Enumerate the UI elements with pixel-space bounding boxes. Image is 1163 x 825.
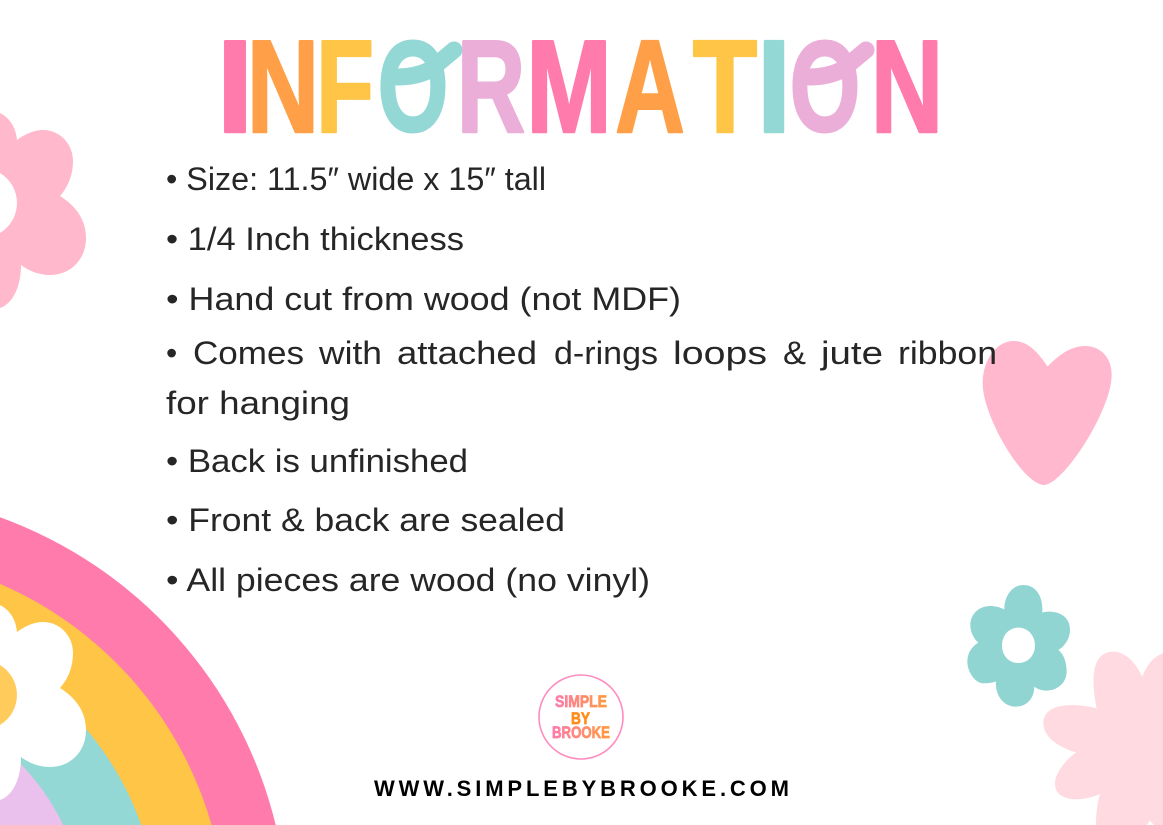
logo badge [539, 675, 623, 759]
text: back: • Back is unfinished [166, 443, 468, 479]
title [216, 13, 943, 161]
icon: teal flower [967, 585, 1070, 707]
text: front and back: • Front & back are sealed [166, 502, 565, 538]
icon: white flower on rainbow [0, 605, 86, 800]
title: T [693, 14, 757, 161]
logo badge: BY [571, 710, 590, 728]
text: d-rings first line: loops [673, 335, 767, 371]
text: d-rings first line: attached [397, 335, 537, 371]
icon: pink flower top left [0, 113, 86, 308]
website url: WWW.SIMPLEBYBROOKE.COM [374, 776, 789, 801]
text: d-rings first line: with [318, 335, 382, 371]
text: d-rings first line: Comes [193, 335, 304, 371]
text: d-rings first line: ribbon [898, 335, 997, 371]
text: hanging second line: for hanging [166, 385, 350, 421]
logo badge: SIMPLE [555, 693, 607, 711]
title: F [316, 14, 374, 161]
text: d-rings first line: d-rings [554, 335, 658, 371]
text: d-rings first line: & [783, 335, 806, 371]
title: N [871, 13, 943, 160]
title: I [216, 13, 254, 161]
text: all pieces: • All pieces are wood (no vinyl) [166, 562, 650, 598]
rainbow [0, 517, 276, 825]
text: size: • Size: 11.5″ wide x 15″ tall [166, 161, 546, 197]
title: M [526, 14, 612, 161]
text: thickness: • 1/4 Inch thickness [166, 221, 464, 257]
icon: pink heart [983, 341, 1112, 485]
title: O [790, 14, 860, 159]
title: N [247, 13, 319, 160]
text: d-rings first line: jute [820, 335, 883, 371]
title: R [457, 14, 525, 161]
title: A [615, 13, 685, 161]
text: d-rings first line: • [166, 335, 177, 371]
logo badge: BROOKE [552, 724, 610, 742]
title: O [378, 14, 448, 159]
title: I [757, 13, 791, 161]
text: hand cut: • Hand cut from wood (not MDF) [166, 281, 681, 317]
icon: light pink flower [1043, 652, 1163, 825]
